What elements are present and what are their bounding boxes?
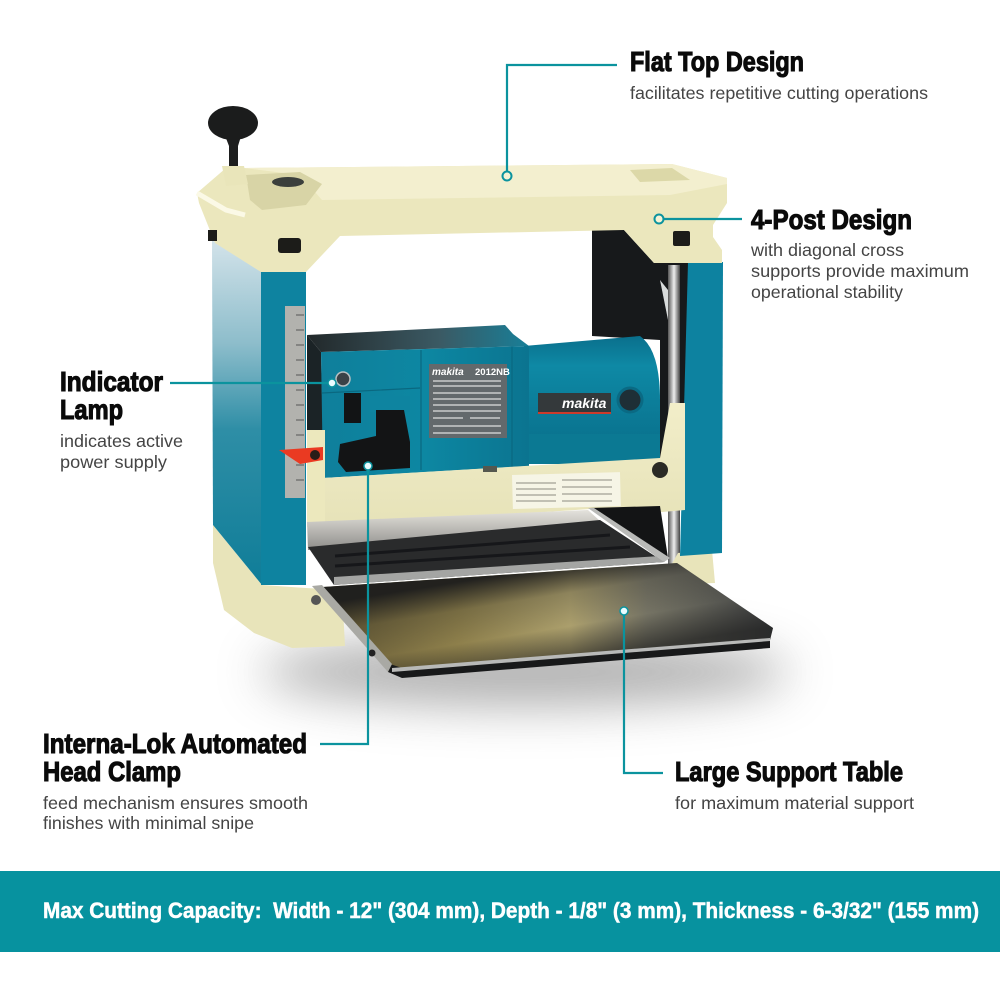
description: [43, 793, 308, 833]
callout: 4-post design: [654, 204, 969, 302]
description: operational stability: [751, 282, 903, 302]
top frame: [197, 164, 727, 272]
description: finishes with minimal snipe: [43, 813, 254, 833]
left post side: [212, 240, 262, 585]
heading: [60, 366, 163, 425]
bar bolts: [483, 462, 668, 478]
heading: Indicator: [60, 366, 163, 397]
leader line: [170, 382, 332, 384]
leader line: [507, 65, 617, 176]
heading: [43, 728, 307, 787]
head front block: [321, 346, 529, 478]
description: with diagonal cross: [750, 240, 904, 260]
cream cross bar: [323, 403, 685, 527]
marker: [364, 462, 372, 470]
leader line: [320, 466, 368, 744]
makita specification plate: [429, 364, 510, 438]
banner background: [0, 871, 1000, 952]
description: indicates active: [60, 431, 183, 451]
callout: large support table: [620, 607, 914, 813]
motor housing: [524, 336, 660, 436]
heading: Head Clamp: [43, 756, 181, 787]
motor badge: [538, 393, 611, 414]
motor round button: [618, 388, 642, 412]
marker: [328, 379, 336, 387]
heading: 4-Post Design: [751, 204, 912, 235]
marker: [654, 214, 664, 224]
heading: Interna-Lok Automated: [43, 728, 307, 759]
heading: Lamp: [60, 394, 123, 425]
feed bed: [307, 506, 670, 585]
marker: [502, 172, 512, 180]
description: feed mechanism ensures smooth: [43, 793, 308, 813]
leader line: [624, 611, 663, 773]
marker: [620, 607, 628, 615]
clamp handle: [338, 396, 410, 472]
description: facilitates repetitive cutting operations: [630, 83, 928, 103]
rear dark column: [592, 230, 690, 565]
support table: [311, 563, 773, 678]
leader line: [659, 218, 742, 220]
black switch: [344, 393, 361, 423]
left post front: [261, 270, 306, 585]
motor base: [512, 434, 660, 464]
description: supports provide maximum: [751, 261, 969, 281]
banner: max cutting capacity: [0, 871, 1000, 952]
head left dark side: [307, 335, 323, 440]
makita specification plate: makita: [432, 367, 464, 378]
left base foot: [213, 525, 345, 648]
makita specification plate: 2012NB: [475, 367, 510, 378]
description: [60, 431, 183, 472]
callout: flat top design: [502, 46, 928, 180]
callout: indicator lamp: [60, 366, 336, 472]
red depth lever: [279, 447, 323, 464]
heading: Flat Top Design: [630, 46, 804, 77]
indicator lamp: [336, 372, 350, 386]
bar specification label: [512, 472, 621, 509]
depth crank knob: [208, 106, 258, 186]
head top face: [307, 325, 529, 352]
left cream column: [307, 430, 325, 527]
description: power supply: [60, 452, 167, 472]
drop shadow under machine: [260, 638, 790, 706]
right post: [680, 262, 723, 556]
machine: thickness planer: [197, 106, 773, 678]
callout: head clamp: [43, 462, 372, 833]
description: [750, 240, 969, 302]
right base foot: [660, 550, 715, 585]
heading: Large Support Table: [675, 756, 903, 787]
motor badge: makita: [562, 395, 607, 411]
description: for maximum material support: [675, 793, 914, 813]
ruler scale: [285, 306, 305, 498]
head block seams: [322, 347, 512, 470]
